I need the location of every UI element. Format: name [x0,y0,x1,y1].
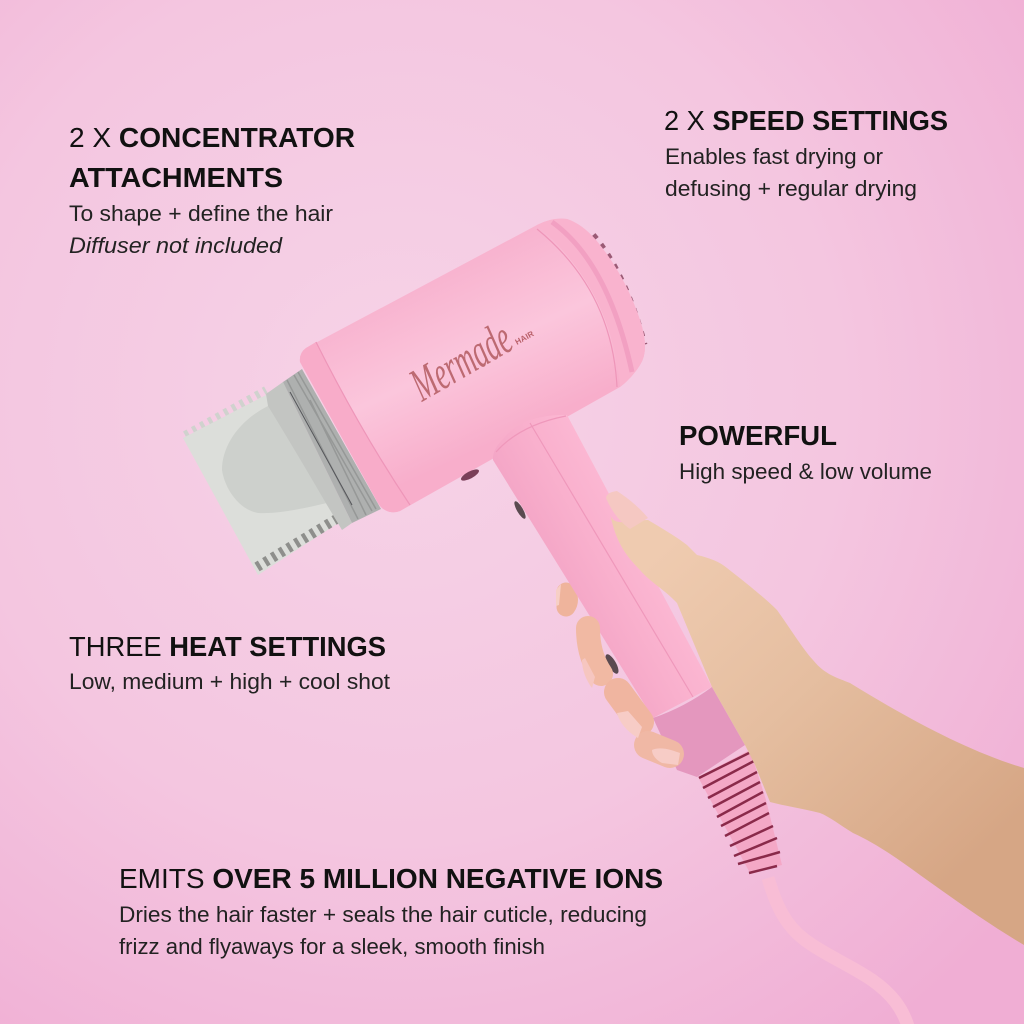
handle buttons [512,500,621,676]
heading and text: powerful: POWERFUL [679,420,837,451]
finger nail: middle [617,711,642,738]
heading and text: powerful [679,420,932,484]
finger: ring [588,628,601,674]
power cord [768,878,908,1024]
heading and text: powerful: High speed & low volume [679,459,932,484]
heading and text: speed settings: defusing + regular drying [665,176,917,201]
heading and text: heat settings: Low, medium + high + cool shot [69,669,390,694]
heading and text: concentrator attachments [69,122,355,258]
body rim groove [552,222,632,372]
hand and arm [610,513,1024,945]
handle seam [496,416,693,697]
thumb nail [606,491,648,529]
top teeth [185,390,266,435]
body right band [537,219,645,387]
coiled strain relief [698,750,782,873]
air slot [460,467,480,483]
finger nail: ring [582,658,595,688]
heading and text: speed settings: 2 X SPEED SETTINGS [664,105,948,136]
heading and text: negative ions [119,863,663,959]
body left band [300,342,410,512]
heading and text: negative ions: EMITS OVER 5 MILLION NEGATIVE IONS [119,863,663,894]
dryer body [300,219,645,512]
finger: middle [618,692,640,722]
hair dryer with hand [183,219,1024,1024]
back finger [566,592,568,607]
grey collar ring [283,369,381,523]
finger nail: index [652,748,680,765]
finger nail: back [556,584,561,606]
concentrator nozzle [183,382,352,575]
nozzle plate [183,394,343,575]
heading and text: heat settings [69,631,390,694]
nozzle neck [266,382,352,530]
handle base [653,687,745,777]
body seam lines [316,229,617,505]
logo subtext: HAIR [514,329,536,347]
heading and text: speed settings [664,105,948,201]
heading and text: speed settings: Enables fast drying or [665,144,883,169]
dryer rear grille [592,236,643,345]
heading and text: concentrator attachments: To shape + define the hair [69,201,333,226]
nozzle bulge [222,382,343,513]
fingernails [556,491,680,765]
logo: Mermade [400,311,521,411]
heading and text: negative ions: Dries the hair faster + seals the hair cuticle, reducing [119,902,647,927]
finger: index [648,745,670,754]
bottom teeth [257,518,338,567]
handle [493,415,712,718]
heading and text: concentrator attachments: Diffuser not included [69,233,283,258]
heading and text: negative ions: frizz and flyaways for a sleek, smooth finish [119,934,545,959]
heading and text: heat settings: THREE HEAT SETTINGS [69,631,386,662]
heading and text: concentrator attachments: 2 X CONCENTRATOR [69,122,355,153]
heading and text: concentrator attachments: ATTACHMENTS [69,162,283,193]
